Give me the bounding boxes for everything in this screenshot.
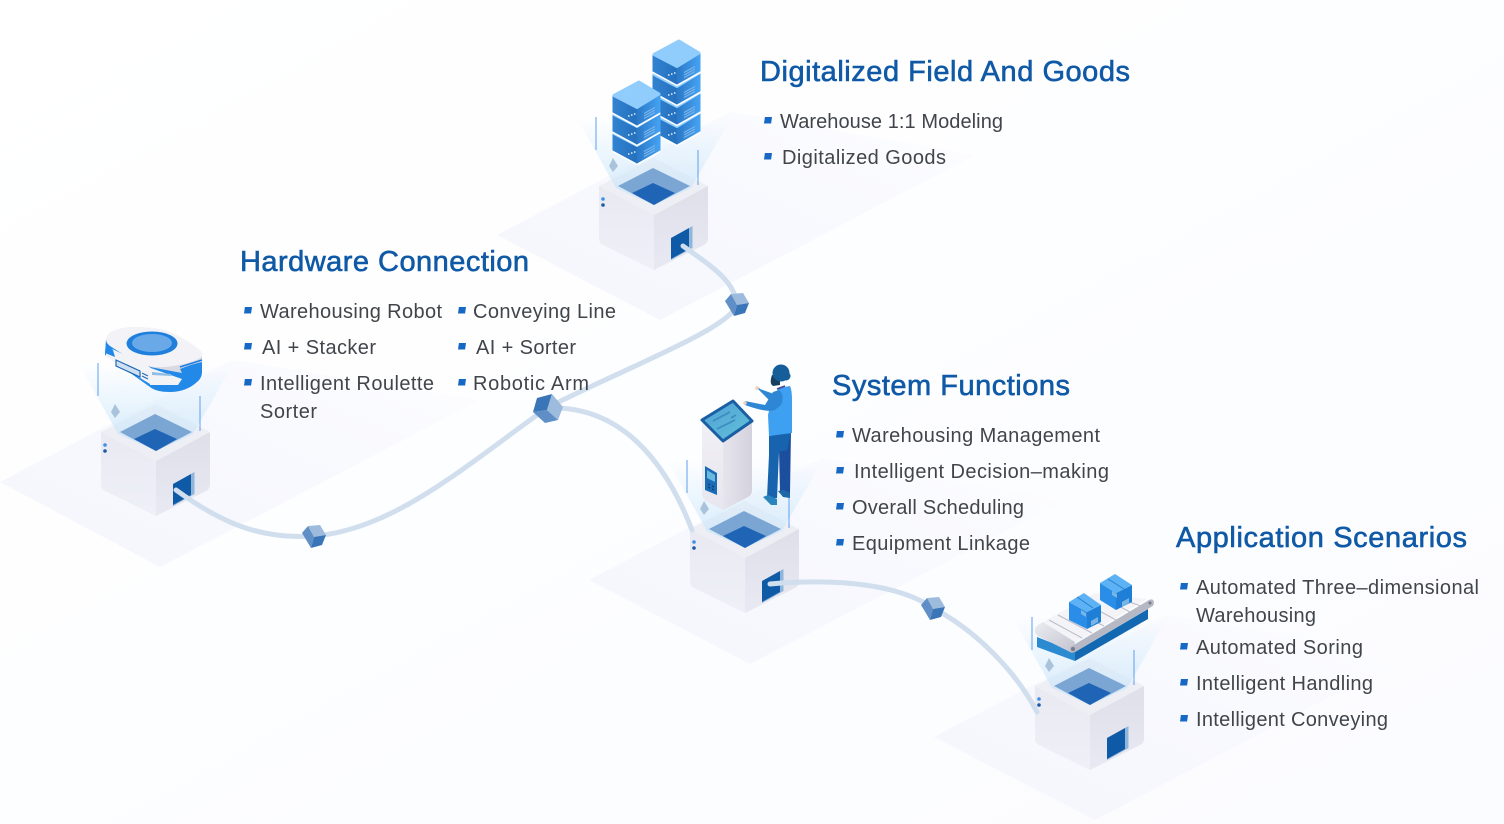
list: application scenarios items: Intelligent Handling xyxy=(1196,673,1373,695)
list: system functions items: Overall Scheduling xyxy=(852,497,1024,519)
list: hardware connection items: Robotic Arm xyxy=(473,373,589,395)
list: digitalized field items: Digitalized Goods xyxy=(782,147,946,169)
illustration: kiosk xyxy=(702,401,752,510)
box: digitalized field xyxy=(577,117,730,270)
illustration: warehousing robot xyxy=(105,327,202,392)
list: hardware connection items: AI + Sorter xyxy=(476,337,576,359)
icon: cube on lower left cable xyxy=(302,525,326,548)
list: system functions items xyxy=(836,425,1109,555)
platform: digitalized field xyxy=(497,112,975,320)
list: application scenarios items: Automated Three–dimensional xyxy=(1196,577,1479,599)
icon: cube on upper cable xyxy=(725,293,749,316)
list: application scenarios items: Warehousing xyxy=(1196,605,1316,627)
list: hardware connection items xyxy=(244,301,616,423)
list: system functions items: Warehousing Management xyxy=(852,425,1100,447)
icon: cube on right cable xyxy=(921,597,945,620)
icon: cube at cable junction xyxy=(533,394,563,423)
list: application scenarios items: Automated Soring xyxy=(1196,637,1363,659)
box: application scenarios xyxy=(1013,617,1166,770)
list: hardware connection items: Warehousing Robot xyxy=(260,301,442,323)
illustration: conveyor with parcels xyxy=(1035,574,1154,661)
heading: Digitalized Field And Goods: Digitalized Field And Goods xyxy=(760,56,1130,88)
list: system functions items: Equipment Linkage xyxy=(852,533,1030,555)
box: system functions xyxy=(668,460,821,613)
list: digitalized field items xyxy=(764,111,1003,169)
connecting cables xyxy=(176,246,1037,712)
list: system functions items: Intelligent Decision–making xyxy=(854,461,1109,483)
illustration: person xyxy=(743,364,792,505)
list: application scenarios items xyxy=(1180,577,1479,731)
list: digitalized field items: Warehouse 1:1 Modeling xyxy=(780,111,1003,133)
list: hardware connection items: Intelligent Roulette xyxy=(260,373,434,395)
list: hardware connection items: Sorter xyxy=(260,401,317,423)
platform: system functions xyxy=(589,458,1065,664)
heading: Application Scenarios: Application Scenarios xyxy=(1176,522,1467,554)
heading: Hardware Connection: Hardware Connection xyxy=(240,246,529,278)
platform: application scenarios xyxy=(934,615,1410,820)
box: hardware connection xyxy=(79,363,232,516)
heading: System Functions: System Functions xyxy=(832,370,1070,402)
list: application scenarios items: Intelligent Conveying xyxy=(1196,709,1388,731)
illustration: server racks xyxy=(613,41,700,164)
list: hardware connection items: AI + Stacker xyxy=(262,337,376,359)
platform: hardware connection xyxy=(0,360,480,567)
list: hardware connection items: Conveying Line xyxy=(473,301,616,323)
